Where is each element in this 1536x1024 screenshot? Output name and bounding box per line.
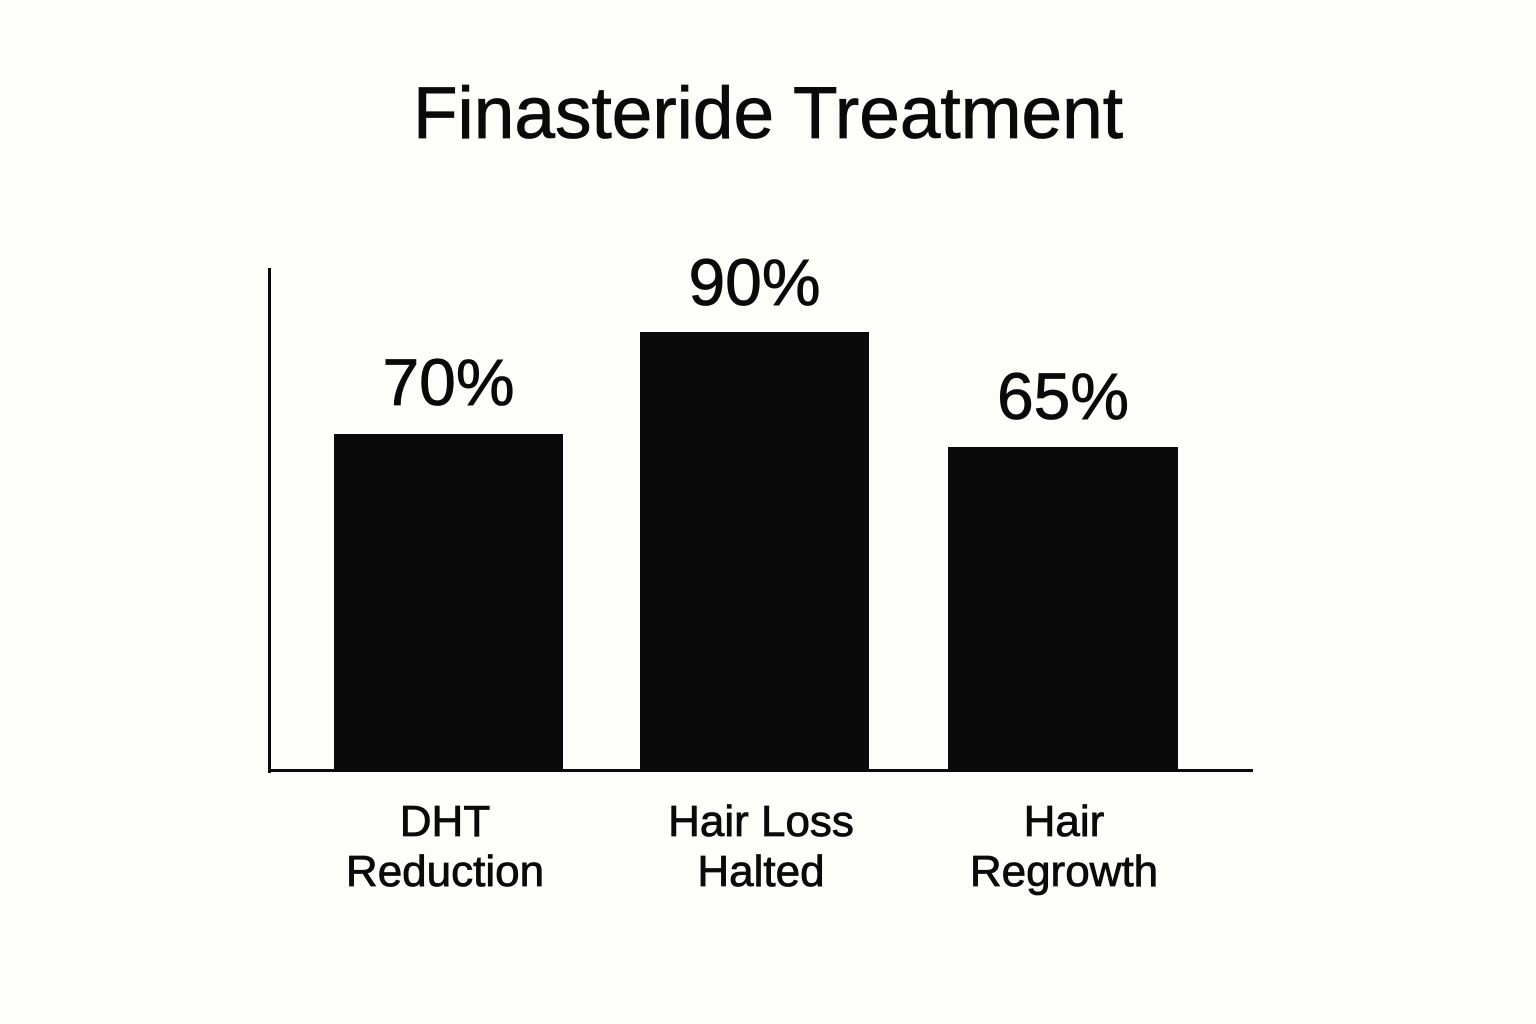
value: 65%: 65% <box>997 359 1129 433</box>
value: 70%: 70% <box>382 345 515 419</box>
label: Hair Regrowth: Regrowth <box>970 847 1158 896</box>
label: Hair Loss Halted: Halted <box>697 847 825 896</box>
bar: DHT Reduction <box>334 434 563 770</box>
y axis <box>268 268 271 773</box>
label: Hair Regrowth: Hair <box>1024 797 1104 846</box>
bar: Hair Regrowth <box>948 447 1178 770</box>
label: Hair Loss Halted: Hair Loss <box>668 797 854 846</box>
label: DHT Reduction: Reduction <box>346 847 544 896</box>
bar: Hair Loss Halted <box>640 332 869 770</box>
label: DHT Reduction: DHT <box>400 797 490 846</box>
label: Hair Loss Halted <box>668 797 854 896</box>
value: 90%: 90% <box>688 245 821 319</box>
title: Finasteride Treatment <box>413 73 1123 154</box>
label: DHT Reduction <box>346 797 544 896</box>
x axis <box>268 769 1253 772</box>
label: Hair Regrowth <box>970 797 1158 896</box>
